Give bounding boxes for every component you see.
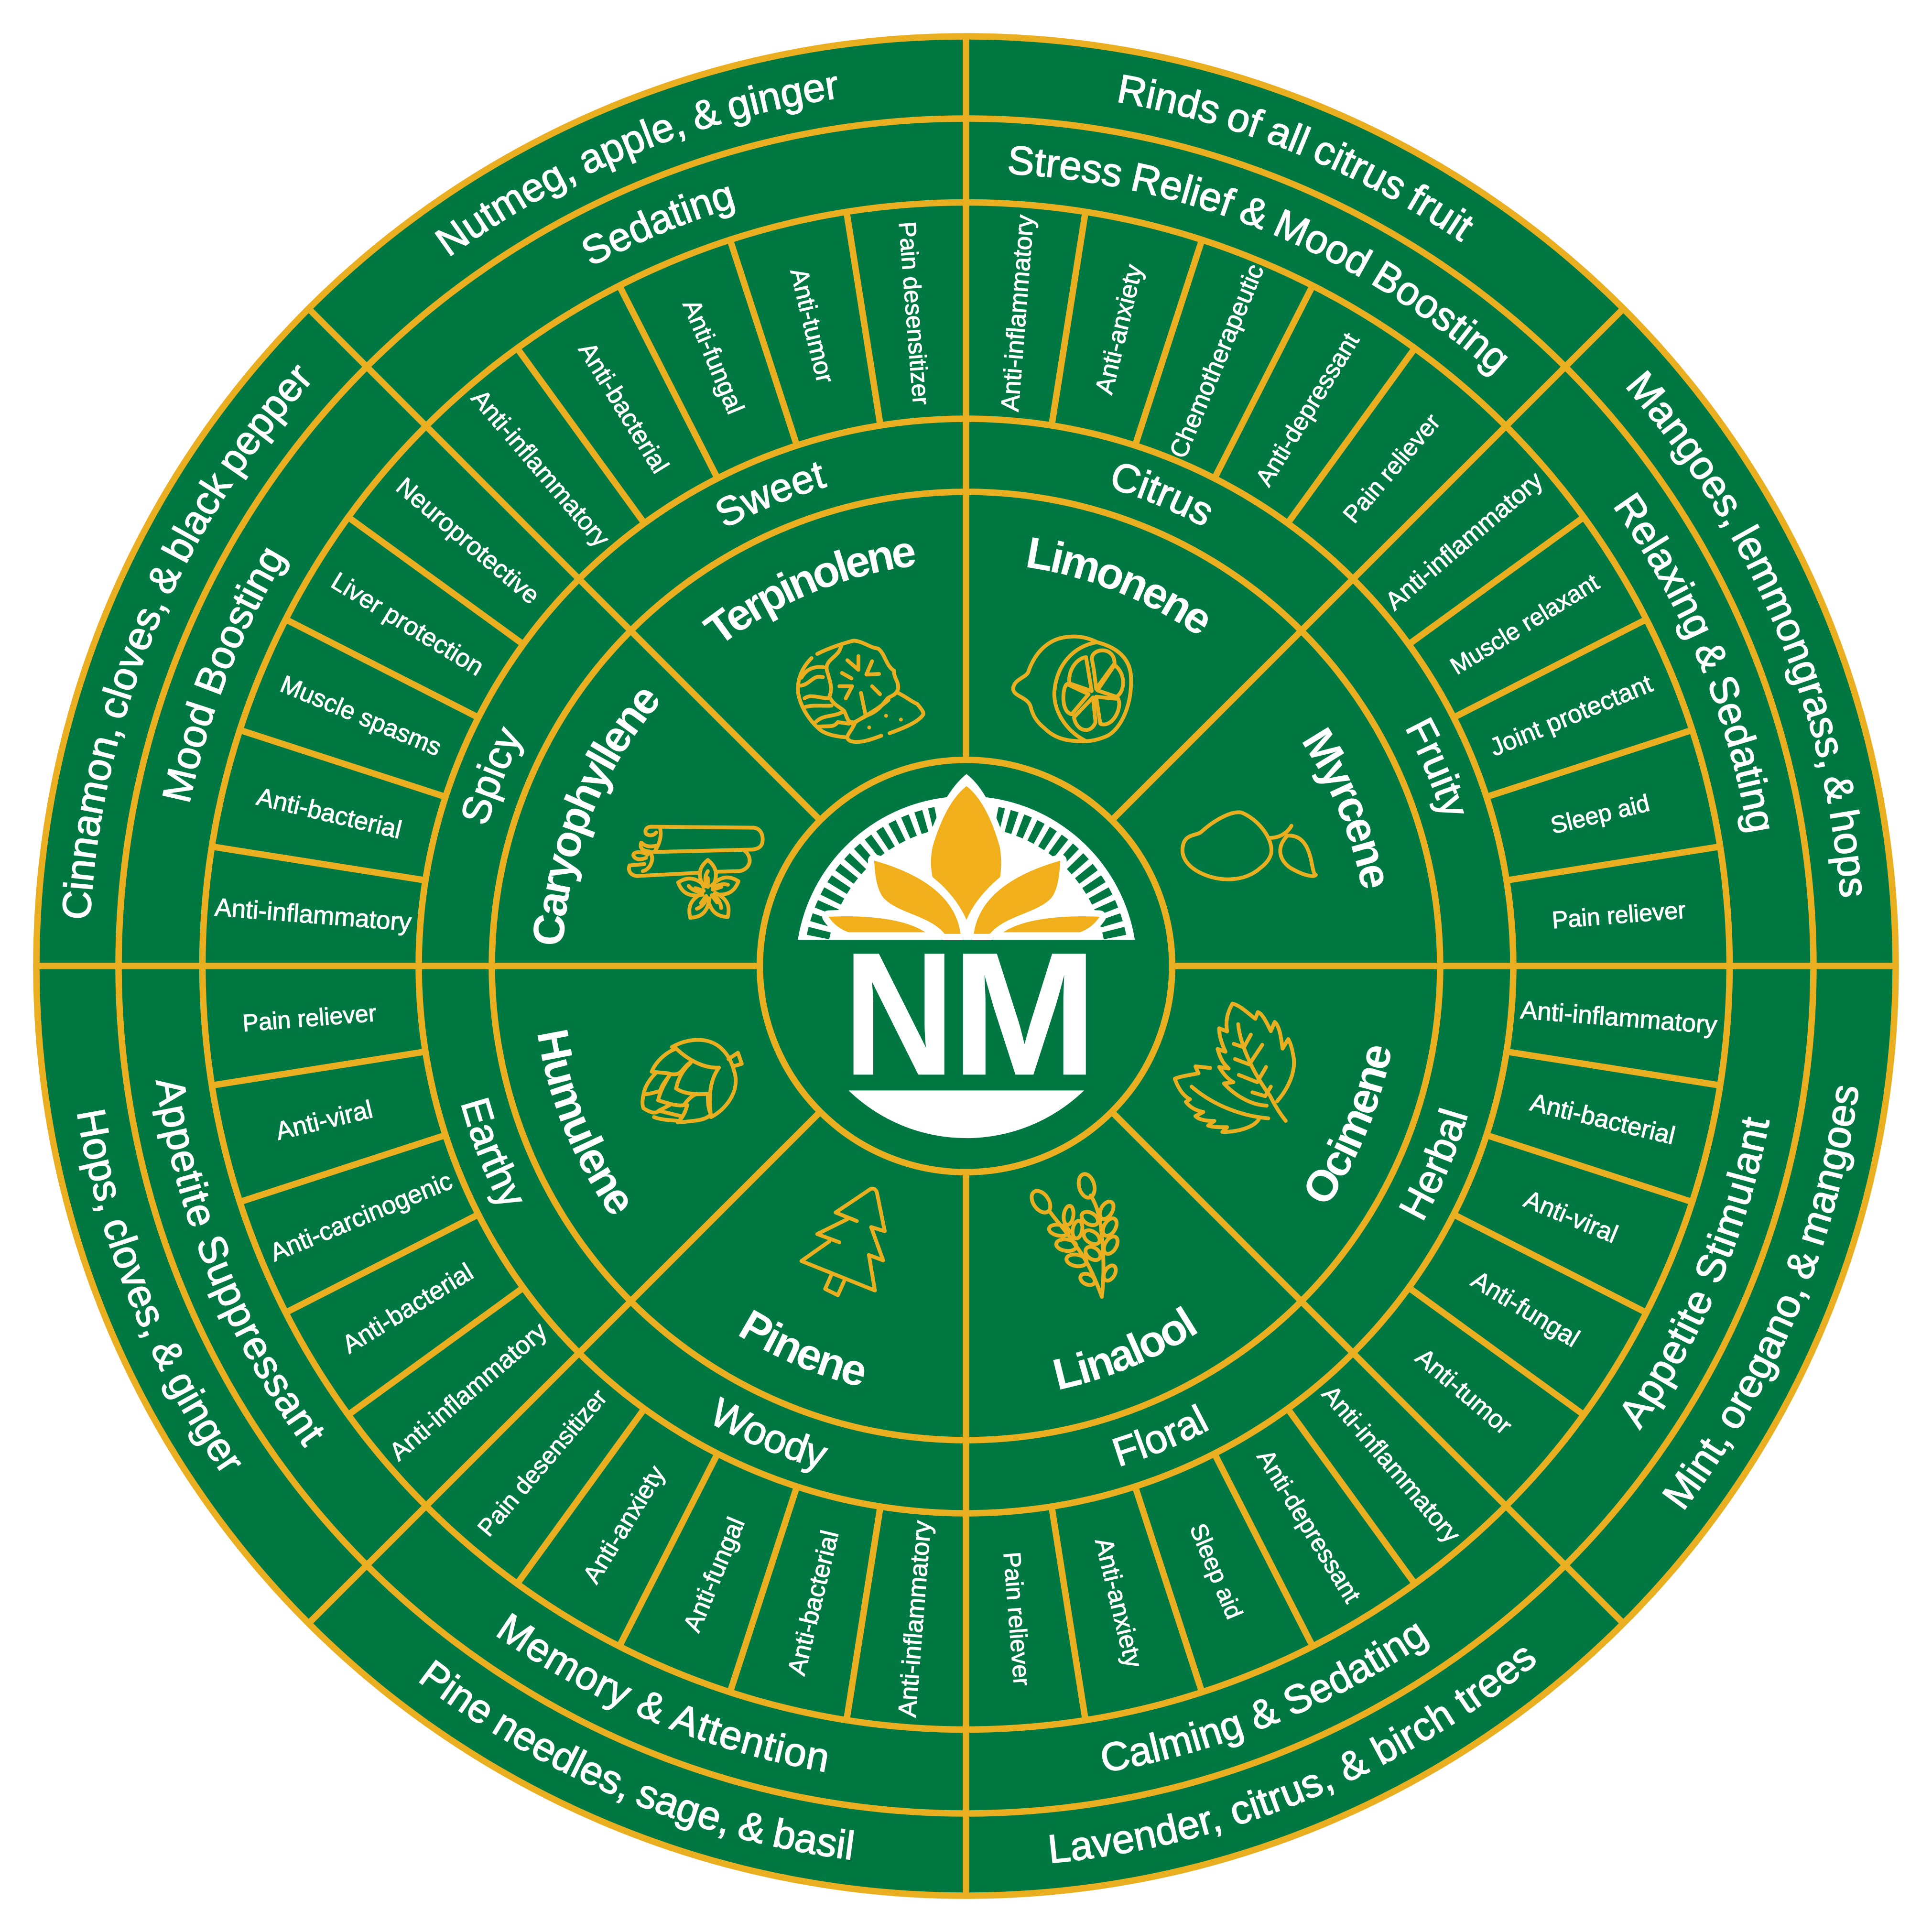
benefit: Muscle relaxant: Muscle relaxant <box>1445 568 1604 680</box>
benefit: Anti-fungal: Anti-fungal <box>678 1513 750 1636</box>
icon: mango <box>1183 812 1316 879</box>
effect text: Mood Boosting <box>143 534 296 813</box>
effect text: Appetite Stimulant <box>1606 1105 1794 1442</box>
benefit: Anti-tumor: Anti-tumor <box>785 265 839 386</box>
flavor text: Floral <box>1104 1395 1216 1477</box>
benefit: Liver protection: Liver protection <box>326 567 489 681</box>
source text: Cinnamon, cloves, & black pepper <box>5 335 326 934</box>
effect text: Calming & Sedating <box>1088 1606 1442 1799</box>
source text: Mint, oregano, & mangoes <box>1650 1072 1895 1529</box>
sector: Humulene <box>48 999 742 1489</box>
flavor text: Herbal <box>1389 1099 1479 1228</box>
benefit: Pain reliever: Pain reliever <box>999 1551 1036 1687</box>
source text: Nutmeg, apple, & ginger <box>417 37 851 269</box>
icon: nutmeg <box>798 640 923 742</box>
logo letters NM: N <box>843 916 955 1112</box>
benefit: Anti-inflammatory: Anti-inflammatory <box>466 384 616 553</box>
sector: Ocimene <box>1175 996 1895 1529</box>
terpene name: Pinene <box>729 1298 878 1401</box>
benefit: Sleep aid: Sleep aid <box>1548 789 1652 839</box>
logo leaf halos <box>828 786 1100 934</box>
icon: hop cone <box>642 1040 742 1122</box>
flavor text: Sweet <box>706 448 834 538</box>
benefit: Chemotherapeutic: Chemotherapeutic <box>1164 260 1270 462</box>
source text: Rinds of all citrus fruit <box>1106 46 1489 253</box>
source text: Mangoes, lemmongrass, & hops <box>1613 344 1920 912</box>
flavor text: Fruity <box>1396 710 1480 825</box>
source text: Pine needles, sage, & basil <box>400 1647 868 1898</box>
logo bowl <box>848 1090 1084 1138</box>
benefit: Sleep aid: Sleep aid <box>1184 1520 1248 1623</box>
terpene name: Humulene <box>517 1016 649 1227</box>
flavor text: Earthy <box>449 1089 537 1216</box>
benefit: Anti-inflammatory: Anti-inflammatory <box>214 893 413 937</box>
icon: mint leaves <box>1175 1004 1294 1132</box>
sector: Terpinolene <box>417 37 935 742</box>
icon: cinnamon sticks and star anise <box>629 827 763 923</box>
logo: NM emblem <box>798 774 1135 1138</box>
source text: Lavender, citrus, & birch trees <box>1034 1628 1560 1909</box>
effect text: Appetite Suppressant <box>125 1065 339 1463</box>
benefit: Neuroprotective: Neuroprotective <box>391 472 545 610</box>
icon: pine tree <box>802 1189 885 1295</box>
benefit: Pain desensitizer: Pain desensitizer <box>472 1384 612 1541</box>
sector: Pinene <box>400 1189 937 1898</box>
benefit: Anti-bacterial: Anti-bacterial <box>782 1528 844 1678</box>
terpene name: Limonene <box>1013 517 1225 648</box>
benefit: Anti-inflammatory: Anti-inflammatory <box>996 214 1040 412</box>
benefit: Anti-tumor: Anti-tumor <box>1410 1343 1518 1440</box>
benefit: Pain reliever: Pain reliever <box>1337 408 1445 528</box>
benefit: Anti-bacterial: Anti-bacterial <box>1528 1088 1678 1150</box>
benefit: Muscle spasms: Muscle spasms <box>276 670 445 761</box>
benefit: Anti-fungal: Anti-fungal <box>1466 1265 1585 1353</box>
effect text: Relaxing & Sedating <box>1602 477 1804 845</box>
terpene name: Ocimene <box>1290 1032 1410 1216</box>
logo letters NM: M <box>951 915 1097 1112</box>
flavor text: Woody <box>702 1388 836 1481</box>
icon: lavender sprig <box>1028 1172 1120 1297</box>
benefit: Anti-viral: Anti-viral <box>273 1095 375 1146</box>
benefit: Joint protectant: Joint protectant <box>1486 669 1657 762</box>
benefit: Anti-inflammatory: Anti-inflammatory <box>1380 466 1548 616</box>
logo dome <box>798 774 1135 940</box>
benefit: Anti-bacterial: Anti-bacterial <box>254 782 404 844</box>
benefit: Anti-inflammatory: Anti-inflammatory <box>1316 1380 1466 1548</box>
benefit: Anti-bacterial: Anti-bacterial <box>337 1258 478 1359</box>
terpene name: Myrcene <box>1290 716 1409 900</box>
benefit: Anti-inflammatory: Anti-inflammatory <box>893 1519 937 1718</box>
flavor text: Citrus <box>1102 450 1222 536</box>
benefit: Pain reliever: Pain reliever <box>241 999 377 1037</box>
sector: Linalool <box>999 1172 1560 1909</box>
logo gold leaves <box>828 786 1100 934</box>
terpene name: Terpinolene <box>690 512 929 659</box>
benefit: Anti-inflammatory: Anti-inflammatory <box>384 1316 553 1466</box>
benefit: Anti-carcinogenic: Anti-carcinogenic <box>266 1167 456 1267</box>
benefit: Anti-anxiety: Anti-anxiety <box>1090 261 1148 397</box>
icon: lemon <box>1013 637 1131 741</box>
terpene name: Caryophyllene <box>501 667 675 961</box>
sector: Myrcene <box>1183 344 1920 933</box>
benefit: Anti-depressant: Anti-depressant <box>1250 328 1365 491</box>
effect text: Stress Relief & Mood Boosting <box>993 94 1537 387</box>
benefit: Pain desensitizer: Pain desensitizer <box>894 220 935 406</box>
benefit: Anti-depressant: Anti-depressant <box>1251 1445 1366 1608</box>
benefit: Anti-bacterial: Anti-bacterial <box>573 337 674 478</box>
logo dome ticks <box>818 818 1115 937</box>
logo letters NM <box>843 915 1097 1112</box>
benefit: Anti-anxiety: Anti-anxiety <box>1089 1535 1148 1671</box>
source text: Hops, cloves, & ginger <box>48 1097 257 1489</box>
benefit: Pain reliever: Pain reliever <box>1551 896 1687 933</box>
benefit: Anti-fungal: Anti-fungal <box>677 295 749 418</box>
sector: Limonene <box>993 46 1537 741</box>
effect text: Sedating <box>573 168 743 276</box>
flavor text: Spicy <box>449 719 532 833</box>
sector: Caryophyllene <box>5 335 763 961</box>
terpene name: Linalool <box>1042 1296 1206 1406</box>
benefit: Anti-viral: Anti-viral <box>1520 1185 1622 1248</box>
benefit: Anti-inflammatory: Anti-inflammatory <box>1520 996 1718 1040</box>
benefit: Anti-anxiety: Anti-anxiety <box>577 1460 671 1588</box>
effect text: Memory & Attention <box>481 1601 842 1800</box>
